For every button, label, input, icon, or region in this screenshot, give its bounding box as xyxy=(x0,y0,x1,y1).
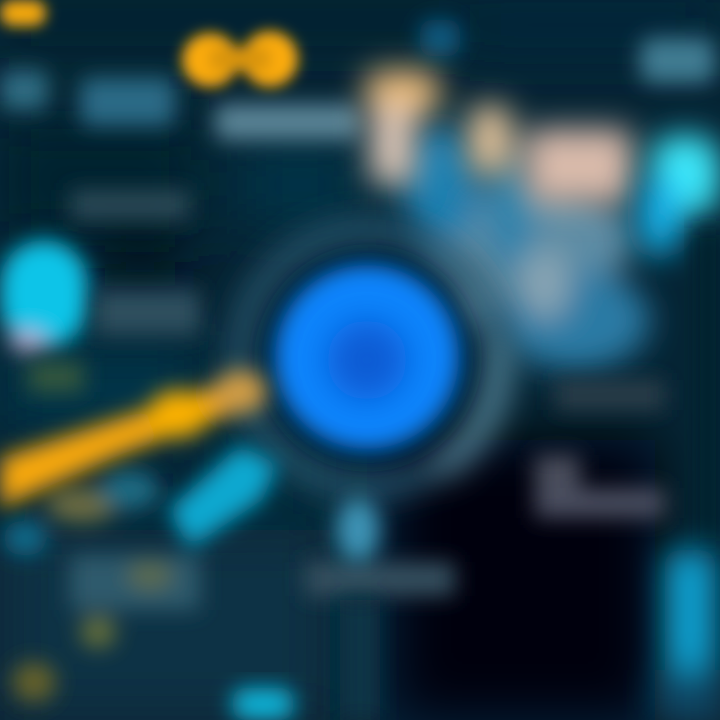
arrow: orange streak xyxy=(0,370,266,508)
icon: cyan bottom glow xyxy=(232,688,294,720)
icon: cyan bottom-right glow xyxy=(655,550,720,720)
icon: amber corner blob xyxy=(0,0,46,26)
icon: pale blue connector below shield xyxy=(336,498,380,720)
shield outer ring xyxy=(240,230,501,486)
icon: blue shield circle xyxy=(266,256,470,460)
dark right vertical band xyxy=(696,228,720,548)
dark blurred labels on the left xyxy=(3,190,200,702)
icon: cyan diagonal streak xyxy=(168,445,278,548)
panel: light blue haze behind the shield xyxy=(402,125,650,370)
top gray-blue text bars xyxy=(0,20,715,140)
peach highlighted text blocks xyxy=(365,70,633,204)
icon: amber double pill xyxy=(182,31,298,87)
icon: bright cyan glow on right xyxy=(638,135,720,257)
dark gray text blurs lower right xyxy=(305,380,665,596)
icon: cyan circle on left xyxy=(0,240,88,353)
